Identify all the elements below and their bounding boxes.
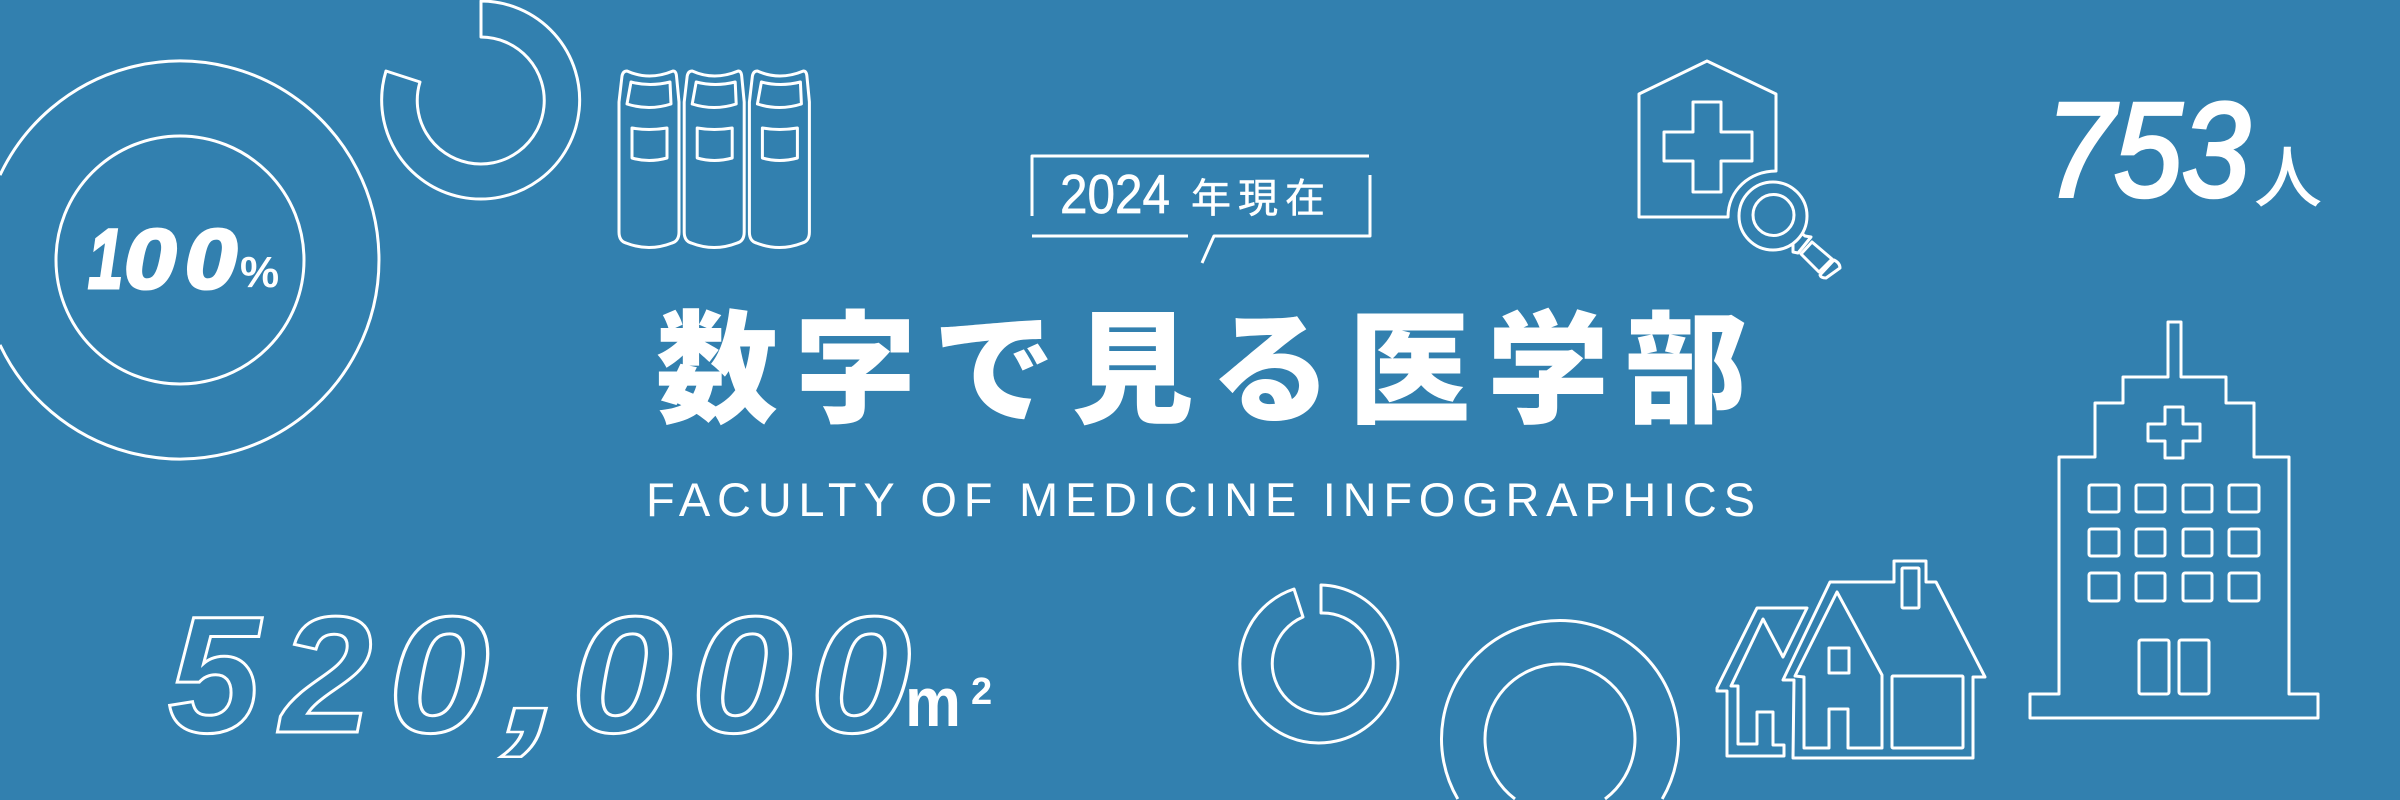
magnifier xyxy=(1739,182,1840,278)
chart: bottom ring xyxy=(1442,621,1678,799)
icon: books xyxy=(619,71,809,248)
value 100%: 00 xyxy=(124,212,237,306)
icon: hospital xyxy=(2030,322,2318,718)
callout: 2024 speech bubble xyxy=(1032,156,1370,263)
value 753: 753 xyxy=(2046,76,2250,225)
garage xyxy=(1892,676,1963,748)
ring outline xyxy=(0,61,379,459)
hospital cross xyxy=(2148,407,2200,458)
bubble text: 年現在 xyxy=(1191,177,1325,221)
title: 数字で見る医学部 xyxy=(656,303,1747,439)
bubble frame xyxy=(1032,156,1370,263)
shield xyxy=(1639,61,1776,217)
main gable xyxy=(1795,592,1882,748)
unit 人: 人 xyxy=(2255,141,2321,215)
stat: 520,000 m² xyxy=(168,582,992,768)
subtitle: FACULTY OF MEDICINE INFOGRAPHICS xyxy=(646,473,1755,526)
book 3 xyxy=(749,71,809,248)
unit m²: 2 xyxy=(971,671,992,713)
value 520,000 outlined: , xyxy=(501,588,565,767)
gable window xyxy=(1829,648,1849,673)
doors xyxy=(2139,640,2209,694)
small house xyxy=(1717,608,1807,756)
icon: houses xyxy=(1717,561,1985,758)
unit m²: m xyxy=(905,663,961,741)
value 100%: % xyxy=(240,248,279,297)
windows xyxy=(2089,485,2259,601)
book 1 xyxy=(619,71,679,248)
chart: bottom donut xyxy=(1240,585,1398,743)
stat: 100% ring xyxy=(0,61,379,459)
book 2 xyxy=(684,71,744,248)
value 100% xyxy=(88,212,279,306)
chart: top donut arc xyxy=(382,1,580,199)
bubble text xyxy=(1060,163,1325,225)
stat: 753 people xyxy=(2046,76,2321,225)
icon: shield with cross and magnifier xyxy=(1639,61,1840,278)
value 520,000 outlined: 52 xyxy=(168,583,372,768)
value 100%: 1 xyxy=(88,212,123,306)
value 520,000 outlined: 0000 xyxy=(388,582,911,767)
bubble text: 2024 xyxy=(1060,163,1170,225)
hospital building xyxy=(2030,322,2318,718)
cross xyxy=(1664,102,1752,192)
main house xyxy=(1783,561,1985,758)
chimney xyxy=(1902,568,1919,608)
